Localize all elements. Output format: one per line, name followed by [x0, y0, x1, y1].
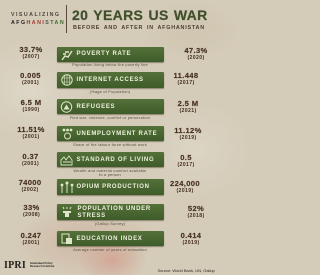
- row: standard of living: 0.5: [180, 152, 192, 162]
- row: unemployment rate: (2019): [179, 135, 197, 141]
- row: standard of living: 0.37: [22, 152, 39, 160]
- logo: Visualizing Afghanistan: [11, 12, 65, 26]
- row: unemployment rate: UNEMPLOYMENT RATE: [76, 130, 157, 136]
- row: population under stress: STRESS: [78, 212, 106, 218]
- title: [72, 7, 208, 30]
- row: internet access: (2017): [177, 80, 195, 86]
- row: opium production: OPIUM PRODUCTION: [76, 184, 150, 190]
- row: refugees: Fled war, violence, conflict or persecution: [70, 114, 150, 120]
- row: poverty rate: [19, 45, 208, 67]
- row: poverty rate: 33.7%: [19, 45, 43, 54]
- row: education index: Average number of years of education: [73, 246, 147, 252]
- row: opium production: [18, 178, 200, 196]
- row: internet access: 0.005: [20, 71, 41, 80]
- row: education index: EDUCATION INDEX: [76, 236, 143, 242]
- logo: Visualizing Afghanistan: AFGHANISTAN: [11, 20, 65, 26]
- row: refugees: (1990): [22, 107, 40, 113]
- row: refugees: (2021): [179, 108, 197, 114]
- row: standard of living: STANDARD OF LIVING: [76, 156, 154, 162]
- row: internet access: 11.448: [174, 71, 198, 80]
- row: standard of living: (2001): [22, 160, 39, 166]
- row: unemployment rate: (2001): [22, 134, 40, 140]
- row: education index: (2019): [182, 240, 200, 246]
- row: internet access: (%age of Population): [90, 89, 130, 94]
- row: poverty rate: (2020): [187, 55, 205, 61]
- row: opium production: 74000: [19, 178, 41, 187]
- row: population under stress: 52%: [188, 204, 204, 213]
- row: standard of living: to a person: [99, 172, 121, 177]
- row: poverty rate: POVERTY RATE: [76, 51, 131, 57]
- row: refugees: 2.5 M: [178, 99, 198, 108]
- row: population under stress: (Gallup Survey): [95, 220, 125, 226]
- row: population under stress: (2008): [23, 212, 40, 218]
- row: population under stress: (2018): [187, 213, 205, 219]
- row: standard of living: Wealth and material comfort available: [73, 168, 147, 172]
- logo: IPRI: Research Institute: [30, 264, 54, 268]
- row: standard of living: [22, 152, 195, 177]
- row: internet access: INTERNET ACCESS: [76, 76, 144, 82]
- row: unemployment rate: 11.51%: [17, 125, 45, 134]
- logo: Visualizing Afghanistan: VISUALIZING: [11, 12, 60, 18]
- logo: IPRI: IPRI: [4, 260, 26, 271]
- title: 20 YEARS US WAR: [72, 7, 208, 23]
- source: Source: World Bank, UN, Gallup: [158, 268, 215, 273]
- logo: IPRI: [4, 260, 54, 271]
- row: unemployment rate: [17, 125, 202, 147]
- row: internet access: (2001): [22, 80, 39, 86]
- row: education index: 0.247: [21, 230, 41, 240]
- row: internet access: [20, 71, 198, 94]
- row: opium production: (2019): [176, 188, 194, 194]
- row: refugees: 6.5 M: [21, 98, 41, 107]
- row: population under stress: 33%: [23, 203, 40, 212]
- row: poverty rate: (2007): [22, 54, 40, 60]
- row: opium production: 224,000: [170, 179, 200, 188]
- row: education index: [20, 230, 201, 252]
- row: population under stress: POPULATION UNDER: [78, 206, 151, 212]
- row: refugees: REFUGEES: [76, 104, 115, 110]
- row: opium production: (2002): [21, 187, 39, 193]
- row: poverty rate: 47.3%: [184, 46, 208, 55]
- row: standard of living: (2017): [177, 162, 195, 168]
- row: population under stress: [23, 203, 205, 226]
- row: unemployment rate: 11.12%: [174, 126, 202, 135]
- row: poverty rate: Population living below the poverty line: [72, 62, 148, 66]
- row: education index: 0.414: [181, 230, 201, 240]
- row: education index: (2001): [22, 240, 40, 246]
- row: unemployment rate: Share of the labour force without work: [73, 142, 147, 147]
- row: refugees: [20, 98, 198, 120]
- logo: IPRI: Islamabad Policy: [30, 261, 53, 265]
- title: BEFORE AND AFTER IN AFGHANISTAN: [73, 24, 205, 30]
